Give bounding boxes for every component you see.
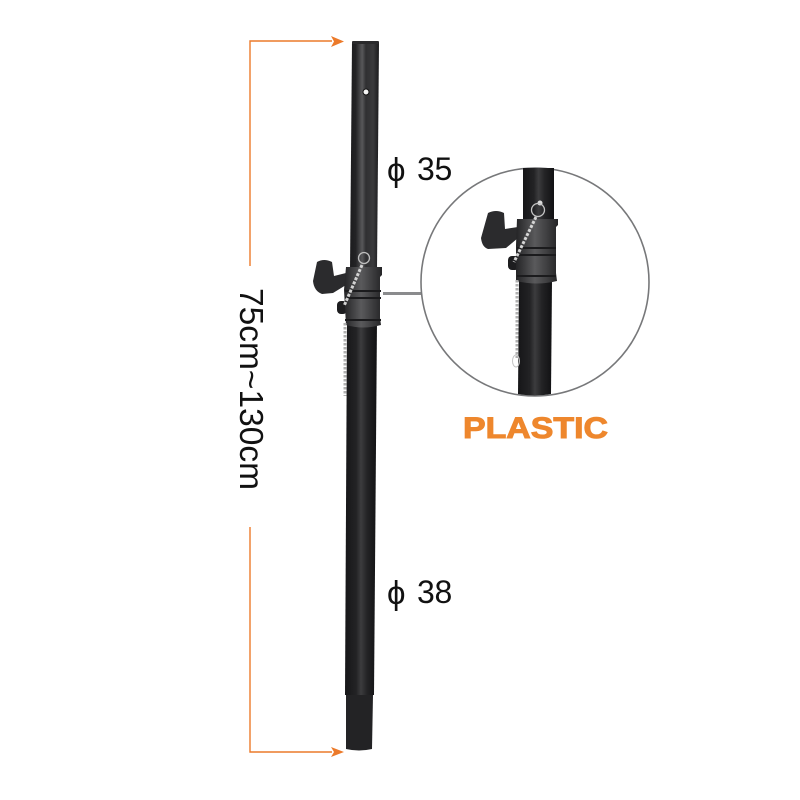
inset upper tube <box>523 168 554 220</box>
inset chain <box>514 217 536 262</box>
diameter label upper: 35 <box>417 151 452 187</box>
diameter label upper <box>387 151 452 188</box>
lower tip <box>346 695 373 750</box>
diameter label upper: ϕ <box>387 151 405 188</box>
safety chain <box>344 265 362 306</box>
inset rear bolt <box>508 256 519 270</box>
clamp knob <box>313 260 346 294</box>
plastic collar <box>344 267 382 328</box>
adjustment hole <box>363 89 369 95</box>
inset knob <box>481 211 518 249</box>
inset lower tube <box>518 280 552 396</box>
inset hole and ring <box>538 200 542 206</box>
inset collar <box>516 219 558 284</box>
pole: main product photo <box>313 41 382 750</box>
dimension bracket: bottom arrow <box>250 527 344 757</box>
upper tube <box>350 42 379 270</box>
length label: 75cm~130cm <box>233 288 270 490</box>
dimension bracket: top arrow <box>250 36 344 266</box>
inset circle: collar detail <box>421 168 649 396</box>
diameter label lower: 38 <box>417 574 452 610</box>
connector to inset <box>383 292 423 295</box>
diameter label lower <box>387 574 452 611</box>
material label: PLASTIC <box>463 412 608 445</box>
clamp rear bolt <box>337 301 347 314</box>
lower tube <box>345 320 377 695</box>
diameter label lower: ϕ <box>387 574 405 611</box>
